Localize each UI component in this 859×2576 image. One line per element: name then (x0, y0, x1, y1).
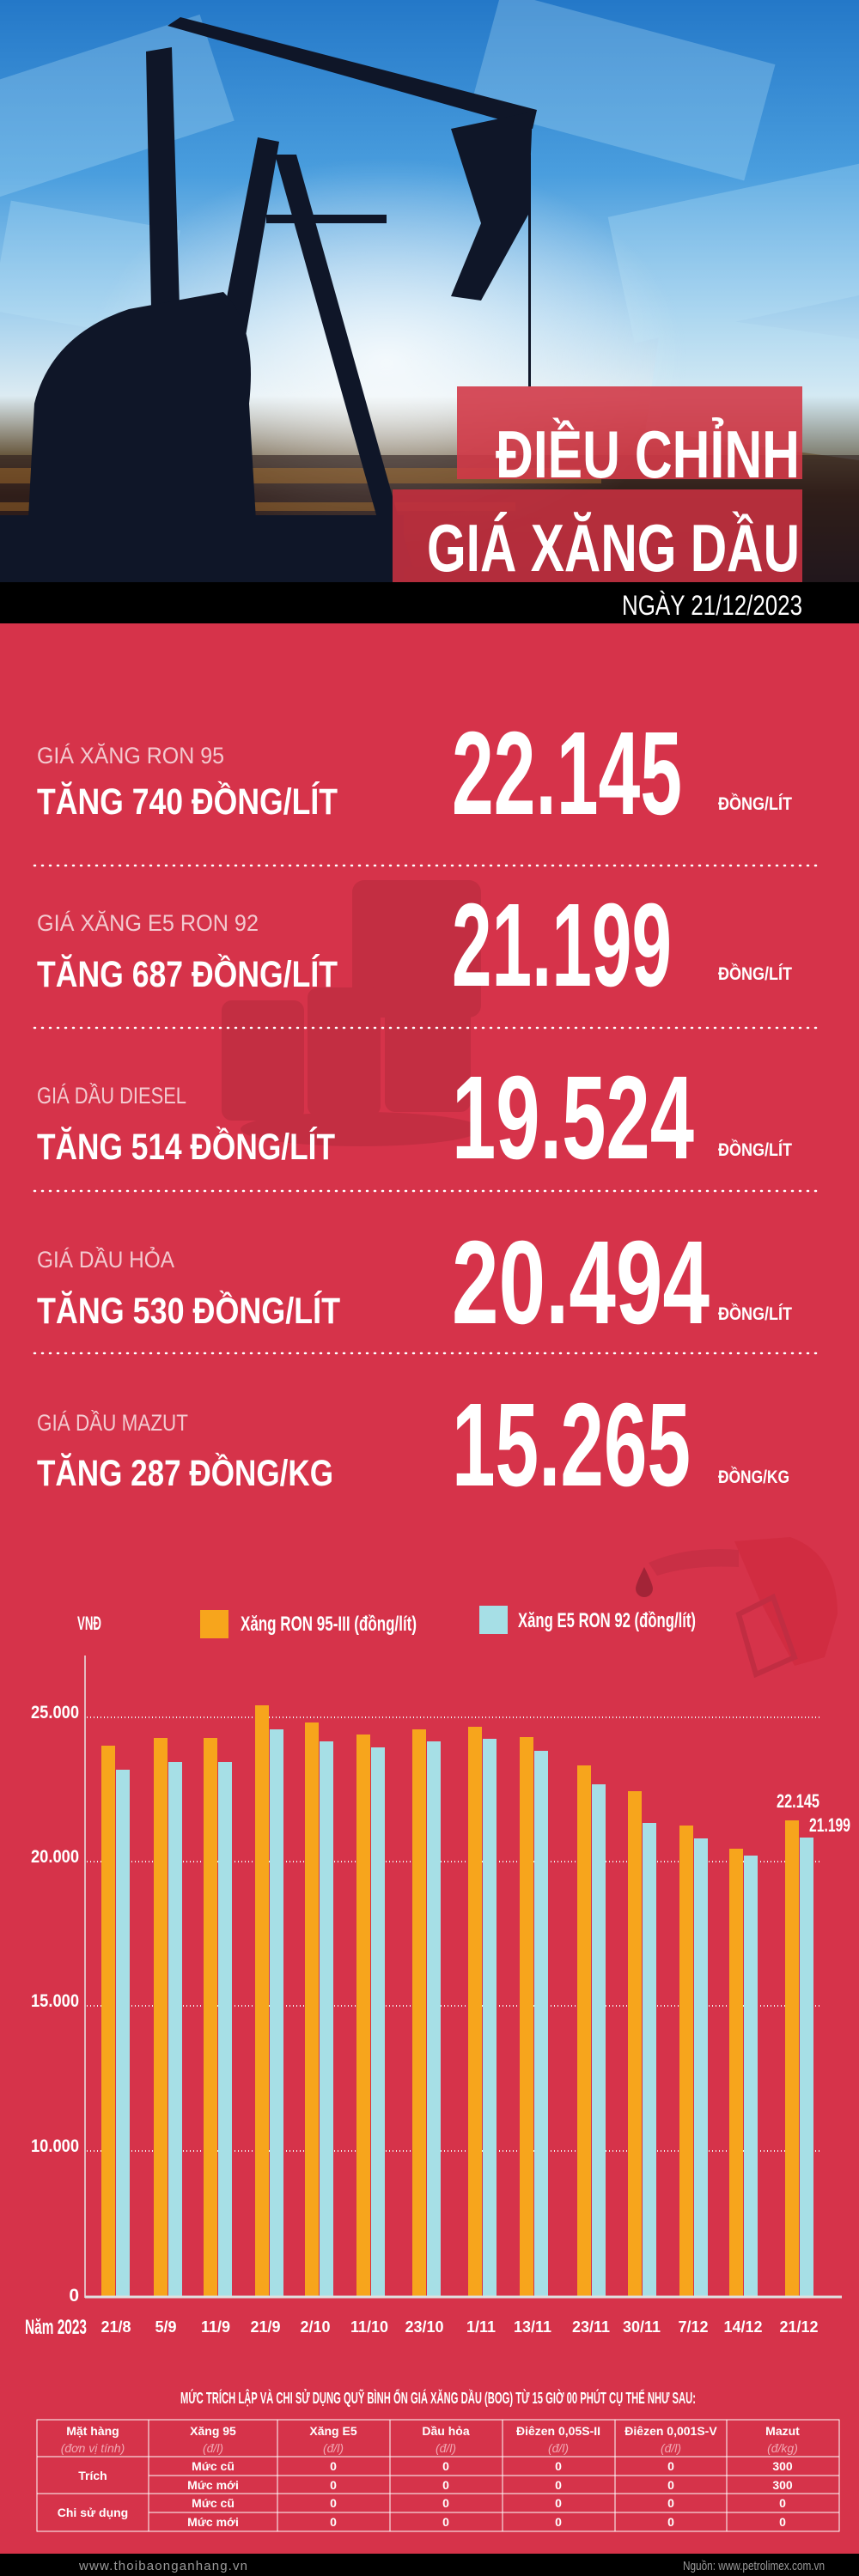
row 2: E5 RON 92: 21.199 (452, 879, 672, 1012)
row 1: RON 95: 22.145 (452, 708, 682, 840)
row 1: RON 95: ĐỒNG/LÍT (718, 793, 792, 814)
table: BOG fund: (đ/l) (436, 2441, 456, 2455)
table: BOG fund: (đ/l) (323, 2441, 344, 2455)
decorative barrels (222, 880, 481, 1146)
row 3: diesel: ĐỒNG/LÍT (718, 1139, 792, 1160)
table: BOG fund: 0 (667, 2459, 674, 2473)
chart legend: Xăng RON 95-III (đồng/lít) (241, 1613, 417, 1636)
icon: fuel nozzle with drop (636, 1537, 838, 1674)
table: BOG fund: 0 (330, 2478, 337, 2492)
bar chart: 22.145 (777, 1790, 819, 1812)
row 4: kerosene: GIÁ DẦU HỎA (37, 1245, 174, 1273)
row 4: kerosene (37, 1217, 792, 1349)
bar chart: 15.000 (31, 1991, 79, 2011)
table: BOG fund: Điêzen 0,001S-V (624, 2424, 717, 2438)
table: BOG fund: (đ/kg) (767, 2441, 798, 2455)
bar chart: 25.000 (31, 1703, 79, 1722)
bar chart: 10.000 (31, 2136, 79, 2156)
body background (0, 623, 859, 2554)
x-axis labels: 21/12 (779, 2318, 819, 2336)
table: BOG fund: 0 (442, 2478, 449, 2492)
table: BOG fund (37, 2420, 839, 2531)
table: BOG fund: (đ/l) (661, 2441, 681, 2455)
bar chart: 20.000 (31, 1847, 79, 1867)
footer: Nguồn: www.petrolimex.com.vn (683, 2559, 825, 2573)
x-axis labels: 11/9 (201, 2318, 230, 2336)
table: BOG fund: 0 (667, 2478, 674, 2492)
x-axis labels: 5/9 (155, 2318, 177, 2336)
title box line 1 (457, 386, 802, 492)
table: BOG fund: (đ/l) (548, 2441, 569, 2455)
table: BOG fund: 0 (330, 2459, 337, 2473)
row 3: diesel (37, 1052, 792, 1184)
bar chart: 0 (69, 2286, 79, 2306)
x-axis labels: 23/10 (405, 2318, 444, 2336)
bar chart (31, 1656, 850, 2306)
row 5: mazut: GIÁ DẦU MAZUT (37, 1409, 188, 1436)
date band: NGÀY 21/12/2023 (622, 590, 802, 621)
table: BOG fund: 0 (555, 2459, 562, 2473)
table: BOG fund: 0 (779, 2496, 786, 2510)
table: BOG fund: 0 (667, 2496, 674, 2510)
header photo: oil pumpjack over dollar bills (0, 0, 859, 582)
table: BOG fund: (đơn vị tính) (61, 2441, 125, 2455)
row 5: mazut: TĂNG 287 ĐỒNG/KG (37, 1452, 333, 1494)
table: BOG fund: 0 (442, 2459, 449, 2473)
x-axis labels: 21/9 (250, 2318, 281, 2336)
x-axis labels: 2/10 (300, 2318, 331, 2336)
x-axis labels: 7/12 (678, 2318, 709, 2336)
row 3: diesel: GIÁ DẦU DIESEL (37, 1082, 186, 1109)
row 3: diesel: TĂNG 514 ĐỒNG/LÍT (37, 1126, 335, 1168)
table: BOG fund: Điêzen 0,05S-II (516, 2424, 600, 2438)
table: BOG fund: 0 (330, 2515, 337, 2529)
table: BOG fund: 300 (772, 2478, 793, 2492)
x-axis labels: 11/10 (350, 2318, 388, 2336)
chart legend: VNĐ (77, 1613, 101, 1634)
table: BOG fund: 300 (772, 2459, 793, 2473)
table: BOG fund: Mức cũ (192, 2496, 235, 2510)
row 2: E5 RON 92: ĐỒNG/LÍT (718, 963, 792, 984)
table: BOG fund: (đ/l) (203, 2441, 223, 2455)
date band (0, 582, 859, 623)
row 5: mazut (37, 1379, 789, 1511)
x-axis labels: 21/8 (101, 2318, 131, 2336)
x-axis labels: 14/12 (723, 2318, 763, 2336)
table: BOG fund: 0 (555, 2478, 562, 2492)
x-axis labels: Năm 2023 (25, 2316, 87, 2339)
title box line 2 (393, 489, 802, 586)
table: BOG fund: Mức mới (187, 2478, 239, 2492)
row 1: RON 95: GIÁ XĂNG RON 95 (37, 743, 224, 769)
row 4: kerosene: ĐỒNG/LÍT (718, 1303, 792, 1324)
chart legend (77, 1606, 696, 1638)
table: BOG fund: 0 (442, 2496, 449, 2510)
table: BOG fund: Trích (78, 2469, 107, 2482)
row 5: mazut: ĐỒNG/KG (718, 1467, 789, 1487)
table: BOG fund: Mặt hàng (66, 2424, 119, 2438)
row 2: E5 RON 92: GIÁ XĂNG E5 RON 92 (37, 910, 259, 936)
footer: www.thoibaonganhang.vn (78, 2559, 247, 2573)
table: BOG fund: 0 (330, 2496, 337, 2510)
x-axis labels: 13/11 (514, 2318, 551, 2336)
table: BOG fund: Dầu hỏa (422, 2424, 470, 2438)
footer (0, 2554, 859, 2576)
table: BOG fund: 0 (442, 2515, 449, 2529)
row 1: RON 95: TĂNG 740 ĐỒNG/LÍT (37, 781, 338, 823)
table: BOG fund: 0 (555, 2515, 562, 2529)
table: BOG fund: Xăng E5 (309, 2424, 357, 2438)
table: BOG fund: 0 (555, 2496, 562, 2510)
row 2: E5 RON 92: TĂNG 687 ĐỒNG/LÍT (37, 953, 338, 995)
row 5: mazut: 15.265 (452, 1379, 691, 1511)
table: BOG fund: Mức cũ (192, 2459, 235, 2473)
row 4: kerosene: TĂNG 530 ĐỒNG/LÍT (37, 1290, 340, 1332)
table: BOG fund: Xăng 95 (190, 2424, 236, 2438)
table: BOG fund: 0 (667, 2515, 674, 2529)
table: BOG fund: Mức mới (187, 2515, 239, 2529)
table: BOG fund: Mazut (765, 2424, 800, 2438)
x-axis labels (25, 2316, 819, 2339)
table: BOG fund: 0 (779, 2515, 786, 2529)
chart legend: Xăng E5 RON 92 (đồng/lít) (518, 1609, 696, 1632)
row 3: diesel: 19.524 (452, 1052, 694, 1184)
row 1: RON 95 (37, 708, 792, 840)
x-axis labels: 23/11 (572, 2318, 610, 2336)
x-axis labels: 30/11 (623, 2318, 661, 2336)
x-axis labels: 1/11 (466, 2318, 496, 2336)
table: BOG fund: Chi sử dụng (58, 2506, 128, 2519)
row 2: E5 RON 92 (37, 879, 792, 1012)
row 4: kerosene: 20.494 (452, 1217, 710, 1349)
